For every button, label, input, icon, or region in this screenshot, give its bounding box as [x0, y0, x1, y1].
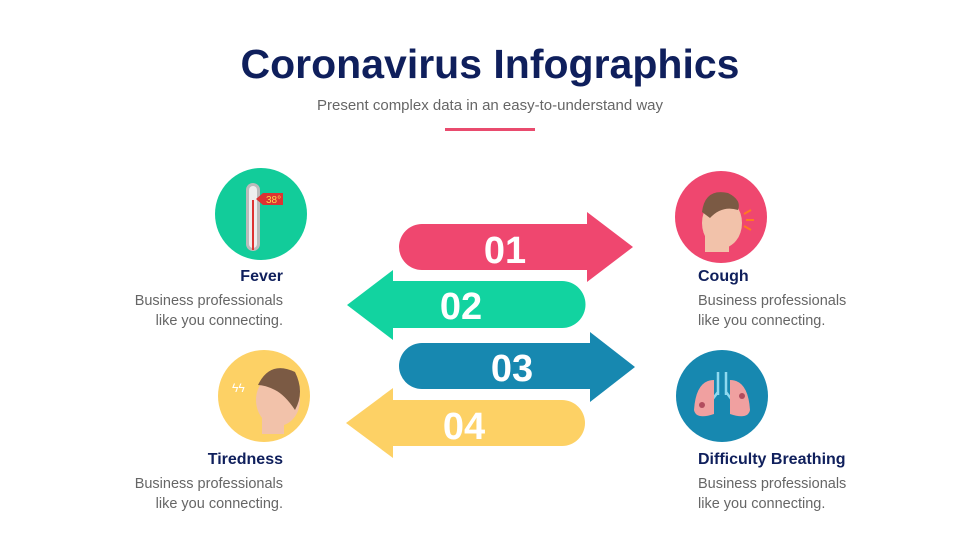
icon: lungs: [676, 350, 768, 442]
block: fever: [135, 268, 283, 329]
arrow 02: [347, 270, 585, 340]
icon: fever thermometer: 38°: [266, 195, 281, 206]
icon: cough: [675, 171, 767, 263]
arrow 01: [399, 212, 633, 282]
block: fever: Business professionals: [135, 293, 283, 309]
block: cough: Business professionals: [698, 293, 846, 309]
block: tiredness: like you connecting.: [156, 496, 283, 512]
block: tiredness: Business professionals: [135, 476, 283, 492]
block: cough: Cough: [698, 268, 749, 285]
arrow 04: [346, 388, 585, 458]
title: Coronavirus Infographics: [241, 41, 739, 87]
icon: tiredness: [218, 350, 310, 442]
arrow 03: [399, 332, 635, 402]
block: tiredness: [135, 451, 283, 512]
arrow 04: 04: [443, 406, 485, 448]
arrow 03: 03: [491, 348, 533, 390]
icon: fever thermometer: [215, 168, 307, 260]
block: difficulty breathing: Difficulty Breathing: [698, 451, 846, 468]
block: difficulty breathing: like you connecting.: [698, 496, 825, 512]
arrow 02: 02: [440, 286, 482, 328]
block: tiredness: Tiredness: [208, 451, 283, 468]
block: cough: [698, 268, 846, 329]
title underline: [445, 128, 535, 131]
arrow 01: 01: [484, 230, 526, 272]
block: difficulty breathing: [698, 451, 846, 512]
subtitle: Present complex data in an easy-to-understand way: [317, 97, 663, 114]
block: fever: Fever: [240, 268, 283, 285]
block: cough: like you connecting.: [698, 313, 825, 329]
icon: tiredness: ϟϟ: [232, 381, 245, 395]
block: fever: like you connecting.: [156, 313, 283, 329]
block: difficulty breathing: Business professionals: [698, 476, 846, 492]
